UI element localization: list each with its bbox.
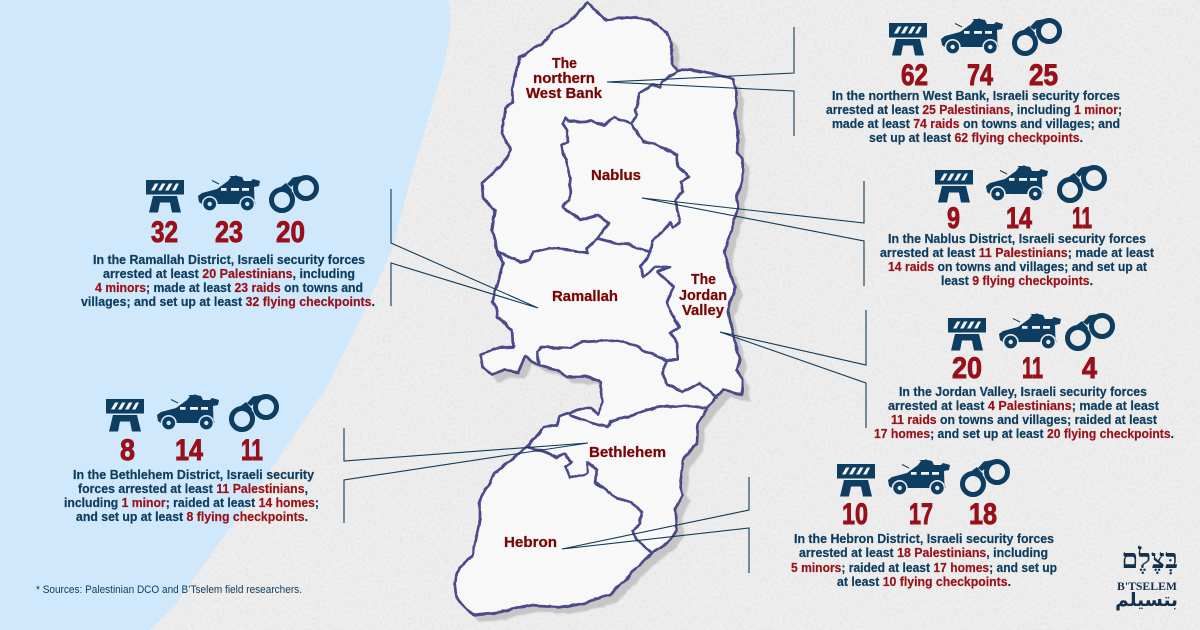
description: arrested at least 20 Palestinians, including — [103, 266, 355, 281]
description: at least 10 flying checkpoints. — [837, 574, 1011, 589]
numbers: 74 — [967, 59, 993, 92]
label: northern West Bank — [526, 56, 603, 102]
label: Jordan Valley: Jordan — [679, 288, 727, 304]
description: arrested at least 11 Palestinians; made at least — [880, 245, 1155, 260]
numbers: 20 — [276, 216, 305, 249]
logo: B'Tselem: بتسيلم — [1115, 590, 1178, 611]
icon: handcuffs — [1068, 314, 1112, 348]
description: 17 homes; and set up at least 20 flying checkpoints. — [874, 426, 1174, 441]
sources note: * Sources: Palestinian DCO and B’Tselem field researchers. — [36, 584, 302, 596]
description — [880, 231, 1155, 288]
panel: Bethlehem — [64, 394, 319, 524]
icon: handcuffs — [232, 394, 276, 430]
map outline — [454, 3, 743, 615]
district boundaries — [498, 71, 717, 553]
numbers: 11 — [1022, 352, 1043, 385]
description: least 9 flying checkpoints. — [941, 273, 1093, 288]
label: northern West Bank: The — [552, 56, 577, 72]
description: arrested at least 4 Palestinians; made at least — [888, 398, 1160, 413]
icon: road barrier — [837, 464, 875, 496]
description: 5 minors; raided at least 17 homes; and set up — [791, 560, 1057, 575]
description: In the Jordan Valley, Israeli security forces — [899, 384, 1147, 399]
numbers: 23 — [215, 216, 243, 249]
label: northern West Bank: northern — [533, 71, 595, 87]
description — [874, 384, 1174, 441]
icon: handcuffs — [272, 176, 316, 210]
description: made at least 74 raids on towns and villages; and — [832, 116, 1120, 131]
numbers: 11 — [1072, 202, 1092, 235]
label: Jordan Valley: Valley — [682, 303, 724, 319]
description: set up at least 62 flying checkpoints. — [869, 130, 1083, 145]
panel: Hebron — [791, 459, 1057, 589]
icon: military vehicle — [986, 165, 1048, 198]
description — [81, 252, 375, 309]
description: 4 minors; made at least 23 raids on towns and — [95, 280, 363, 295]
label: Hebron: Hebron — [504, 535, 557, 551]
logo: B'Tselem: B'TSELEM — [1117, 581, 1177, 593]
numbers: 14 — [175, 434, 203, 467]
numbers: 14 — [1006, 202, 1032, 235]
description: In the Nablus District, Israeli security forces — [888, 231, 1146, 246]
icon: road barrier — [889, 23, 927, 56]
numbers — [952, 352, 1097, 385]
icon: military vehicle — [999, 313, 1061, 346]
district labels — [504, 56, 727, 551]
numbers: 20 — [952, 352, 982, 385]
description: In the Hebron District, Israeli security forces — [794, 531, 1054, 546]
icon: handcuffs — [1014, 18, 1060, 54]
label: northern West Bank: West Bank — [526, 86, 603, 102]
numbers: 11 — [241, 434, 263, 467]
description: 14 raids on towns and villages; and set up at — [888, 259, 1148, 274]
leader lines — [344, 27, 866, 573]
description: including 1 minor; raided at least 14 homes; — [64, 495, 319, 510]
icon: road barrier — [935, 170, 973, 202]
sea area — [0, 0, 451, 630]
icon: road barrier — [106, 399, 144, 432]
icon: military vehicle — [198, 175, 260, 208]
numbers: 25 — [1029, 59, 1058, 92]
description — [826, 88, 1122, 145]
panel: Jordan Valley — [874, 313, 1174, 441]
numbers: 32 — [151, 216, 178, 249]
numbers: 4 — [1082, 352, 1097, 385]
icon: road barrier — [948, 318, 986, 350]
icon: handcuffs — [962, 460, 1008, 494]
label: Jordan Valley: The — [691, 272, 716, 288]
description: arrested at least 25 Palestinians, including 1 minor; — [826, 102, 1122, 117]
numbers — [842, 498, 997, 531]
numbers — [120, 434, 263, 467]
numbers: 8 — [120, 434, 135, 467]
description: forces arrested at least 11 Palestinians, — [78, 481, 308, 496]
panel: Nablus — [880, 165, 1155, 288]
numbers: 18 — [969, 498, 997, 531]
description: In the Bethlehem District, Israeli security — [73, 467, 315, 482]
panel: Ramallah — [81, 175, 375, 309]
description: In the northern West Bank, Israeli security forces — [832, 88, 1120, 103]
numbers: 9 — [947, 202, 960, 235]
numbers — [901, 59, 1058, 92]
panel: northern West Bank — [826, 18, 1122, 145]
numbers: 62 — [901, 59, 928, 92]
label: Nablus: Nablus — [591, 168, 641, 184]
map shadow — [461, 10, 750, 622]
icon: military vehicle — [888, 459, 950, 492]
numbers: 10 — [842, 498, 868, 531]
numbers — [947, 202, 1092, 235]
logo: B'Tselem — [1115, 544, 1178, 611]
description: arrested at least 18 Palestinians, including — [799, 545, 1048, 560]
description — [64, 467, 319, 524]
numbers: 17 — [909, 498, 933, 531]
icon: military vehicle — [157, 394, 219, 427]
icon: handcuffs — [1060, 166, 1104, 200]
label: Bethlehem: Bethlehem — [589, 445, 666, 461]
description: villages; and set up at least 32 flying checkpoints. — [81, 294, 375, 309]
logo: B'Tselem: בְּצֶלֶם — [1121, 544, 1178, 574]
description: and set up at least 8 flying checkpoints. — [76, 509, 308, 524]
icon: road barrier — [146, 180, 184, 212]
icon: military vehicle — [941, 18, 1003, 51]
label: Ramallah: Ramallah — [552, 289, 618, 305]
numbers — [151, 216, 305, 249]
label: Jordan Valley — [679, 272, 727, 319]
description — [791, 531, 1057, 589]
map of the West Bank — [454, 3, 750, 622]
description: 11 raids on towns and villages; raided at least — [891, 412, 1158, 427]
description: In the Ramallah District, Israeli security forces — [93, 252, 365, 267]
